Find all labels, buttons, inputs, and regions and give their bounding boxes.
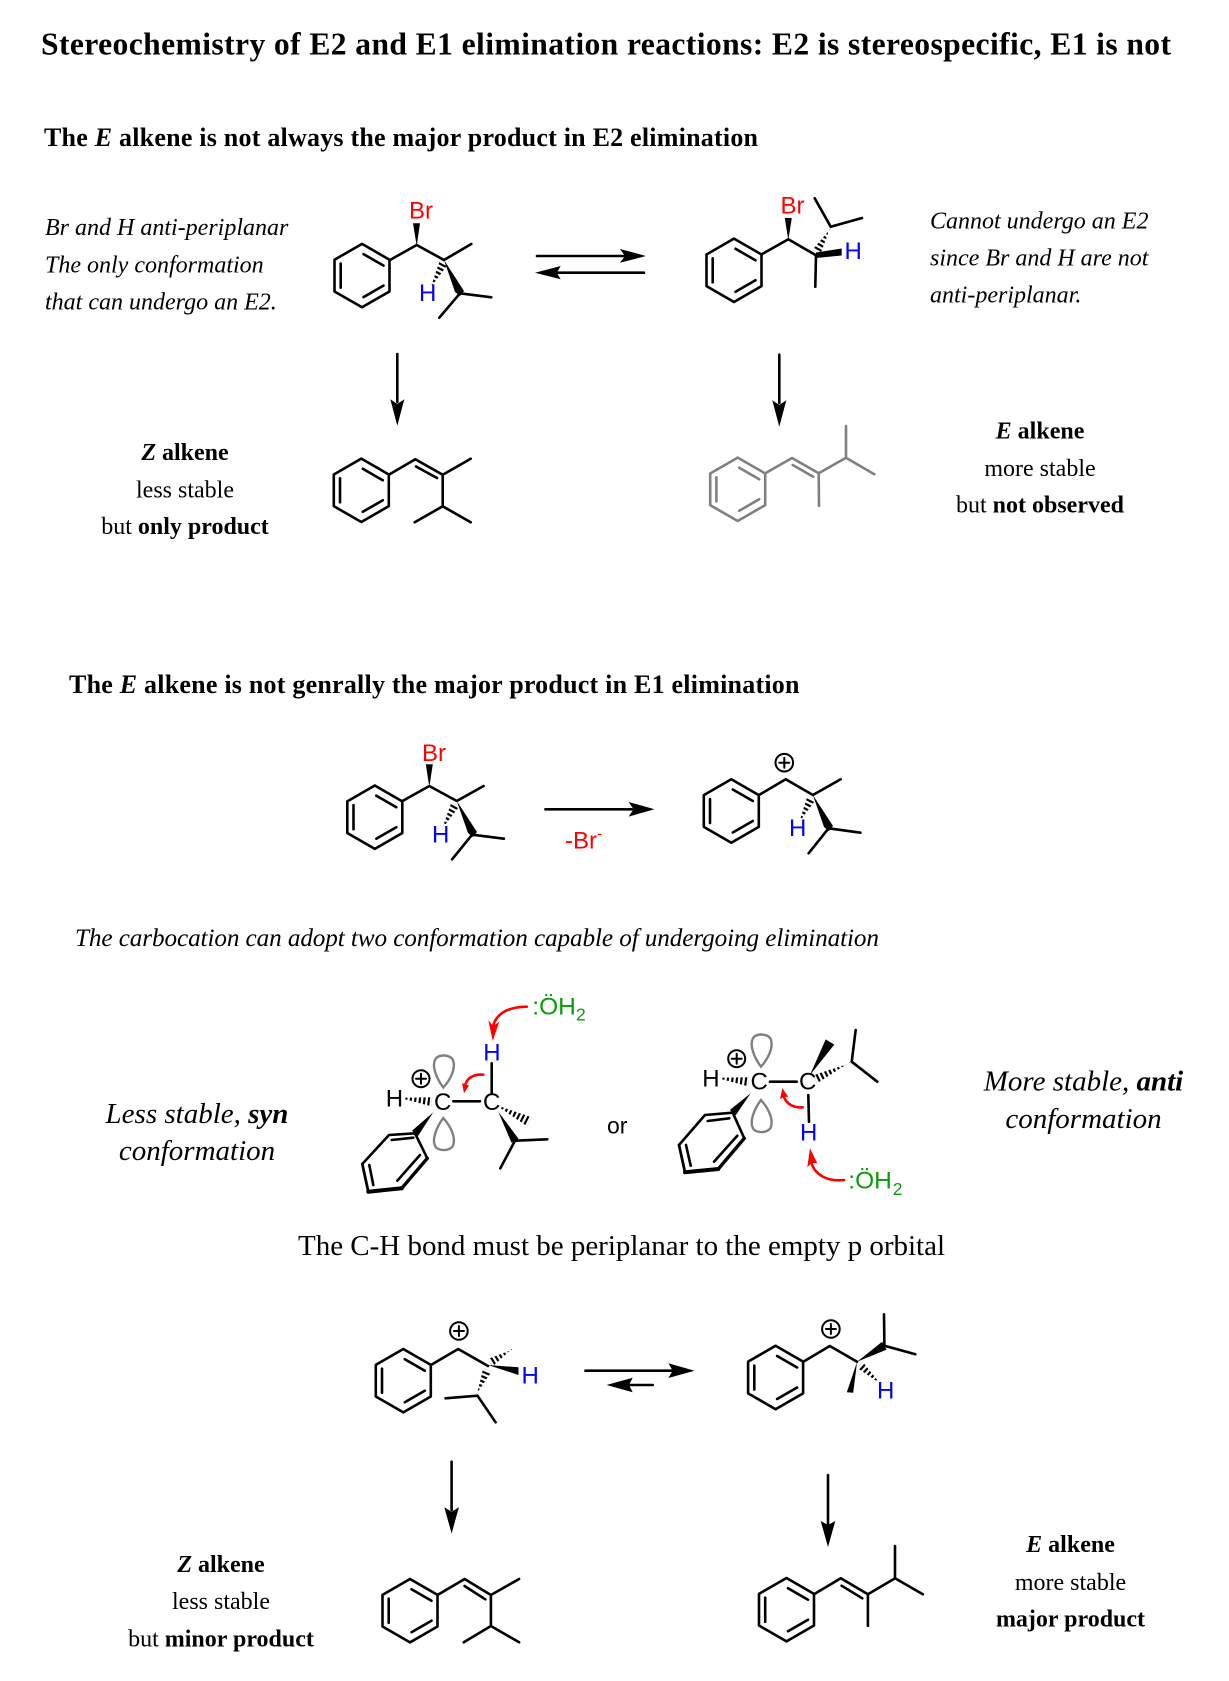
- diagram: anti conformation: C: [750, 1068, 768, 1095]
- text: loss of bromide: -: [597, 825, 602, 842]
- diagram: anti conformation: H: [800, 1120, 817, 1147]
- text: Z alkene label: but only product: [101, 514, 269, 540]
- text: anti conformation label: More stable, anti: [983, 1066, 1183, 1098]
- diagram: syn conformation: 2: [576, 1004, 586, 1024]
- heading: E1 section: The E alkene is not genrally the major product in E1 elimination: [69, 670, 800, 699]
- text: E alkene label: but not observed: [956, 492, 1125, 518]
- text: E alkene label: [956, 418, 1125, 518]
- text: Z alkene minor label: Z alkene: [176, 1552, 265, 1578]
- text: E alkene major label: more stable: [1015, 1570, 1126, 1596]
- molecule: carbocation: H: [789, 815, 806, 842]
- diagram: syn conformation: C: [434, 1089, 451, 1116]
- text: cannot undergo E2 note: anti-periplanar.: [930, 282, 1081, 308]
- text: Z alkene label: less stable: [136, 478, 234, 504]
- diagram: syn conformation: [362, 993, 586, 1192]
- text: loss of bromide: -Br: [565, 827, 597, 854]
- text: anti-periplanar note: that can undergo an E2.: [45, 290, 277, 316]
- arrow: equilibrium E2: [535, 249, 646, 279]
- arrow: to Z product: [444, 1462, 459, 1534]
- molecule: E1 substrate bromide: [347, 740, 504, 859]
- text: anti-periplanar note: The only conformation: [45, 252, 264, 278]
- text: E alkene label: more stable: [984, 456, 1096, 482]
- text: syn conformation label: [105, 1098, 288, 1167]
- molecule: Z alkene product: [334, 459, 471, 522]
- text: Z alkene minor label: less stable: [172, 1589, 270, 1615]
- text: cannot undergo E2 note: [930, 209, 1150, 308]
- molecule: bromide second conformer: [706, 192, 862, 302]
- molecule: bromide anti conformer: [334, 198, 491, 318]
- arrow: left elimination: [390, 354, 404, 426]
- diagram: syn conformation: H: [483, 1040, 501, 1067]
- text: Z alkene minor label: but minor product: [128, 1626, 314, 1652]
- diagram: anti conformation: [679, 1030, 902, 1199]
- text: E alkene label: E alkene: [995, 418, 1085, 444]
- molecule: E1 substrate bromide: H: [432, 822, 449, 849]
- diagram: anti conformation: H: [702, 1066, 720, 1093]
- molecule: bromide anti conformer: H: [419, 280, 436, 307]
- molecule: E alkene major product: [759, 1546, 923, 1641]
- text: cannot undergo E2 note: since Br and H are not: [930, 246, 1150, 272]
- arrow: right elimination: [772, 355, 786, 427]
- molecule: carbocation: [704, 754, 860, 853]
- text: Z alkene label: [101, 440, 269, 540]
- molecule: E1 substrate bromide: Br: [422, 740, 446, 767]
- molecule: bromide second conformer: H: [844, 238, 862, 265]
- text: Z alkene minor label: [128, 1552, 314, 1652]
- text: E alkene major label: major product: [996, 1606, 1145, 1632]
- molecule: carbocation conformer to E: [748, 1314, 915, 1409]
- diagram: syn conformation: C: [483, 1089, 500, 1116]
- diagram: syn conformation: H: [386, 1086, 403, 1113]
- diagram: anti conformation: :ÖH: [848, 1167, 892, 1194]
- molecule: carbocation conformer to Z: H: [522, 1362, 539, 1389]
- text: E alkene major label: [996, 1532, 1145, 1632]
- molecule: Z alkene minor product: [382, 1579, 519, 1642]
- text: anti-periplanar note: Br and H anti-periplanar: [45, 215, 289, 241]
- diagram: anti conformation: 2: [893, 1179, 902, 1199]
- molecule: bromide second conformer: Br: [780, 192, 805, 220]
- text: two conformations note: The carbocation can adopt two conformation capable of undergoing elimination: [75, 925, 879, 952]
- molecule: E alkene product (gray): [710, 426, 874, 521]
- diagram: anti conformation: C: [799, 1068, 816, 1095]
- molecule: carbocation conformer to Z: [376, 1322, 539, 1422]
- arrow: to E product: [821, 1475, 835, 1547]
- text: syn conformation label: Less stable, syn: [105, 1098, 288, 1130]
- text: or: or: [607, 1112, 628, 1138]
- molecule: bromide anti conformer: Br: [409, 198, 433, 224]
- arrow: unequal equilibrium: [586, 1363, 694, 1392]
- text: Z alkene label: Z alkene: [140, 440, 229, 466]
- text: anti conformation label: conformation: [1005, 1103, 1162, 1135]
- title: Stereochemistry of E2 and E1 elimination reactions: E2 is stereospecific, E1 is not: [41, 26, 1171, 62]
- text: anti conformation label: [983, 1066, 1183, 1135]
- arrow: ionisation: [545, 802, 654, 817]
- diagram: syn conformation: :ÖH: [532, 993, 576, 1020]
- text: syn conformation label: conformation: [119, 1135, 275, 1167]
- heading: E2 section: The E alkene is not always the major product in E2 elimination: [44, 123, 759, 152]
- text: E alkene major label: E alkene: [1025, 1532, 1115, 1558]
- text: periplanar caption: The C-H bond must be periplanar to the empty p orbital: [298, 1230, 945, 1262]
- text: cannot undergo E2 note: Cannot undergo an E2: [930, 209, 1148, 235]
- text: anti-periplanar note: [45, 215, 289, 316]
- molecule: carbocation conformer to E: H: [877, 1377, 894, 1404]
